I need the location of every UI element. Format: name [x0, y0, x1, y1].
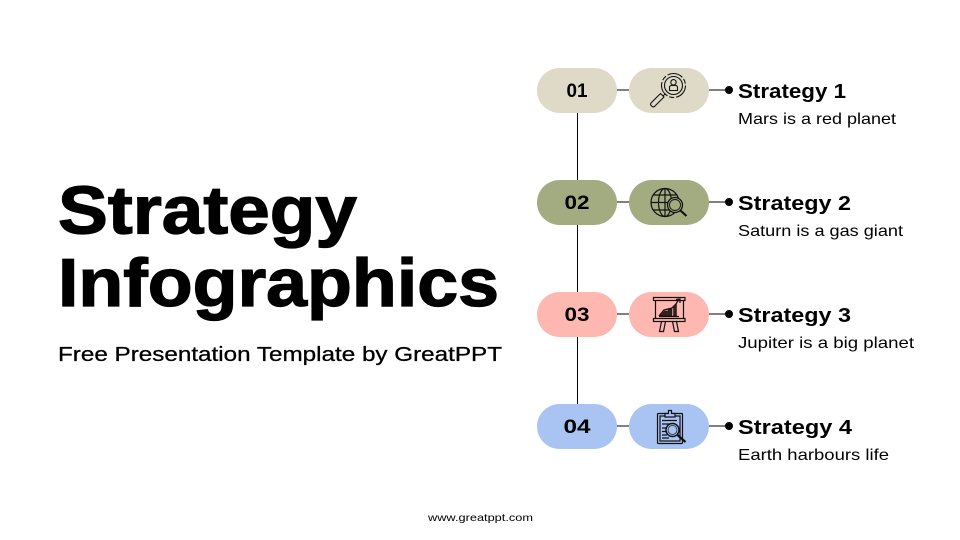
strategy 2 text: Saturn is a gas giant [738, 223, 904, 240]
number pill 04 [537, 404, 617, 449]
strategy 1 text: Mars is a red planet [738, 111, 897, 128]
strategy 1 text [738, 80, 897, 128]
bullet dot [725, 198, 733, 206]
bullet dot [725, 310, 733, 318]
number pill 01: 01 [566, 81, 588, 102]
icon pill: magnifier with person [629, 68, 709, 113]
number pill 03: 03 [564, 305, 590, 326]
subtitle: Free Presentation Template by GreatPPT [58, 343, 503, 366]
strategy 4 text: Strategy 4 [738, 416, 853, 439]
strategy 1 text: Strategy 1 [738, 80, 846, 103]
number pill 03 [537, 292, 617, 337]
strategy 2 text [738, 192, 904, 240]
icon pill: clipboard with magnifier [629, 404, 709, 449]
title: Strategy [58, 172, 357, 248]
number pill 04: 04 [564, 417, 591, 438]
strategy 3 text: Strategy 3 [738, 304, 851, 327]
number pill 01 [537, 68, 617, 113]
strategy 4 text: Earth harbours life [738, 447, 889, 464]
number pill 02: 02 [564, 193, 590, 214]
strategy 4 text [738, 416, 889, 464]
strategy 3 text [738, 304, 915, 352]
title: Infographics [58, 245, 499, 321]
icon pill: presentation board [629, 292, 709, 337]
icon pill: globe with magnifier [629, 180, 709, 225]
bullet dot [725, 86, 733, 94]
step 4 [537, 404, 889, 464]
step 2 [537, 180, 904, 240]
number pill 02 [537, 180, 617, 225]
timeline connector [576, 112, 578, 405]
strategy 2 text: Strategy 2 [738, 192, 851, 215]
bullet dot [725, 422, 733, 430]
footer url: www.greatppt.com [427, 512, 533, 524]
title [58, 172, 499, 321]
step 3 [537, 292, 915, 352]
step 1 [537, 68, 897, 128]
strategy 3 text: Jupiter is a big planet [738, 335, 915, 352]
